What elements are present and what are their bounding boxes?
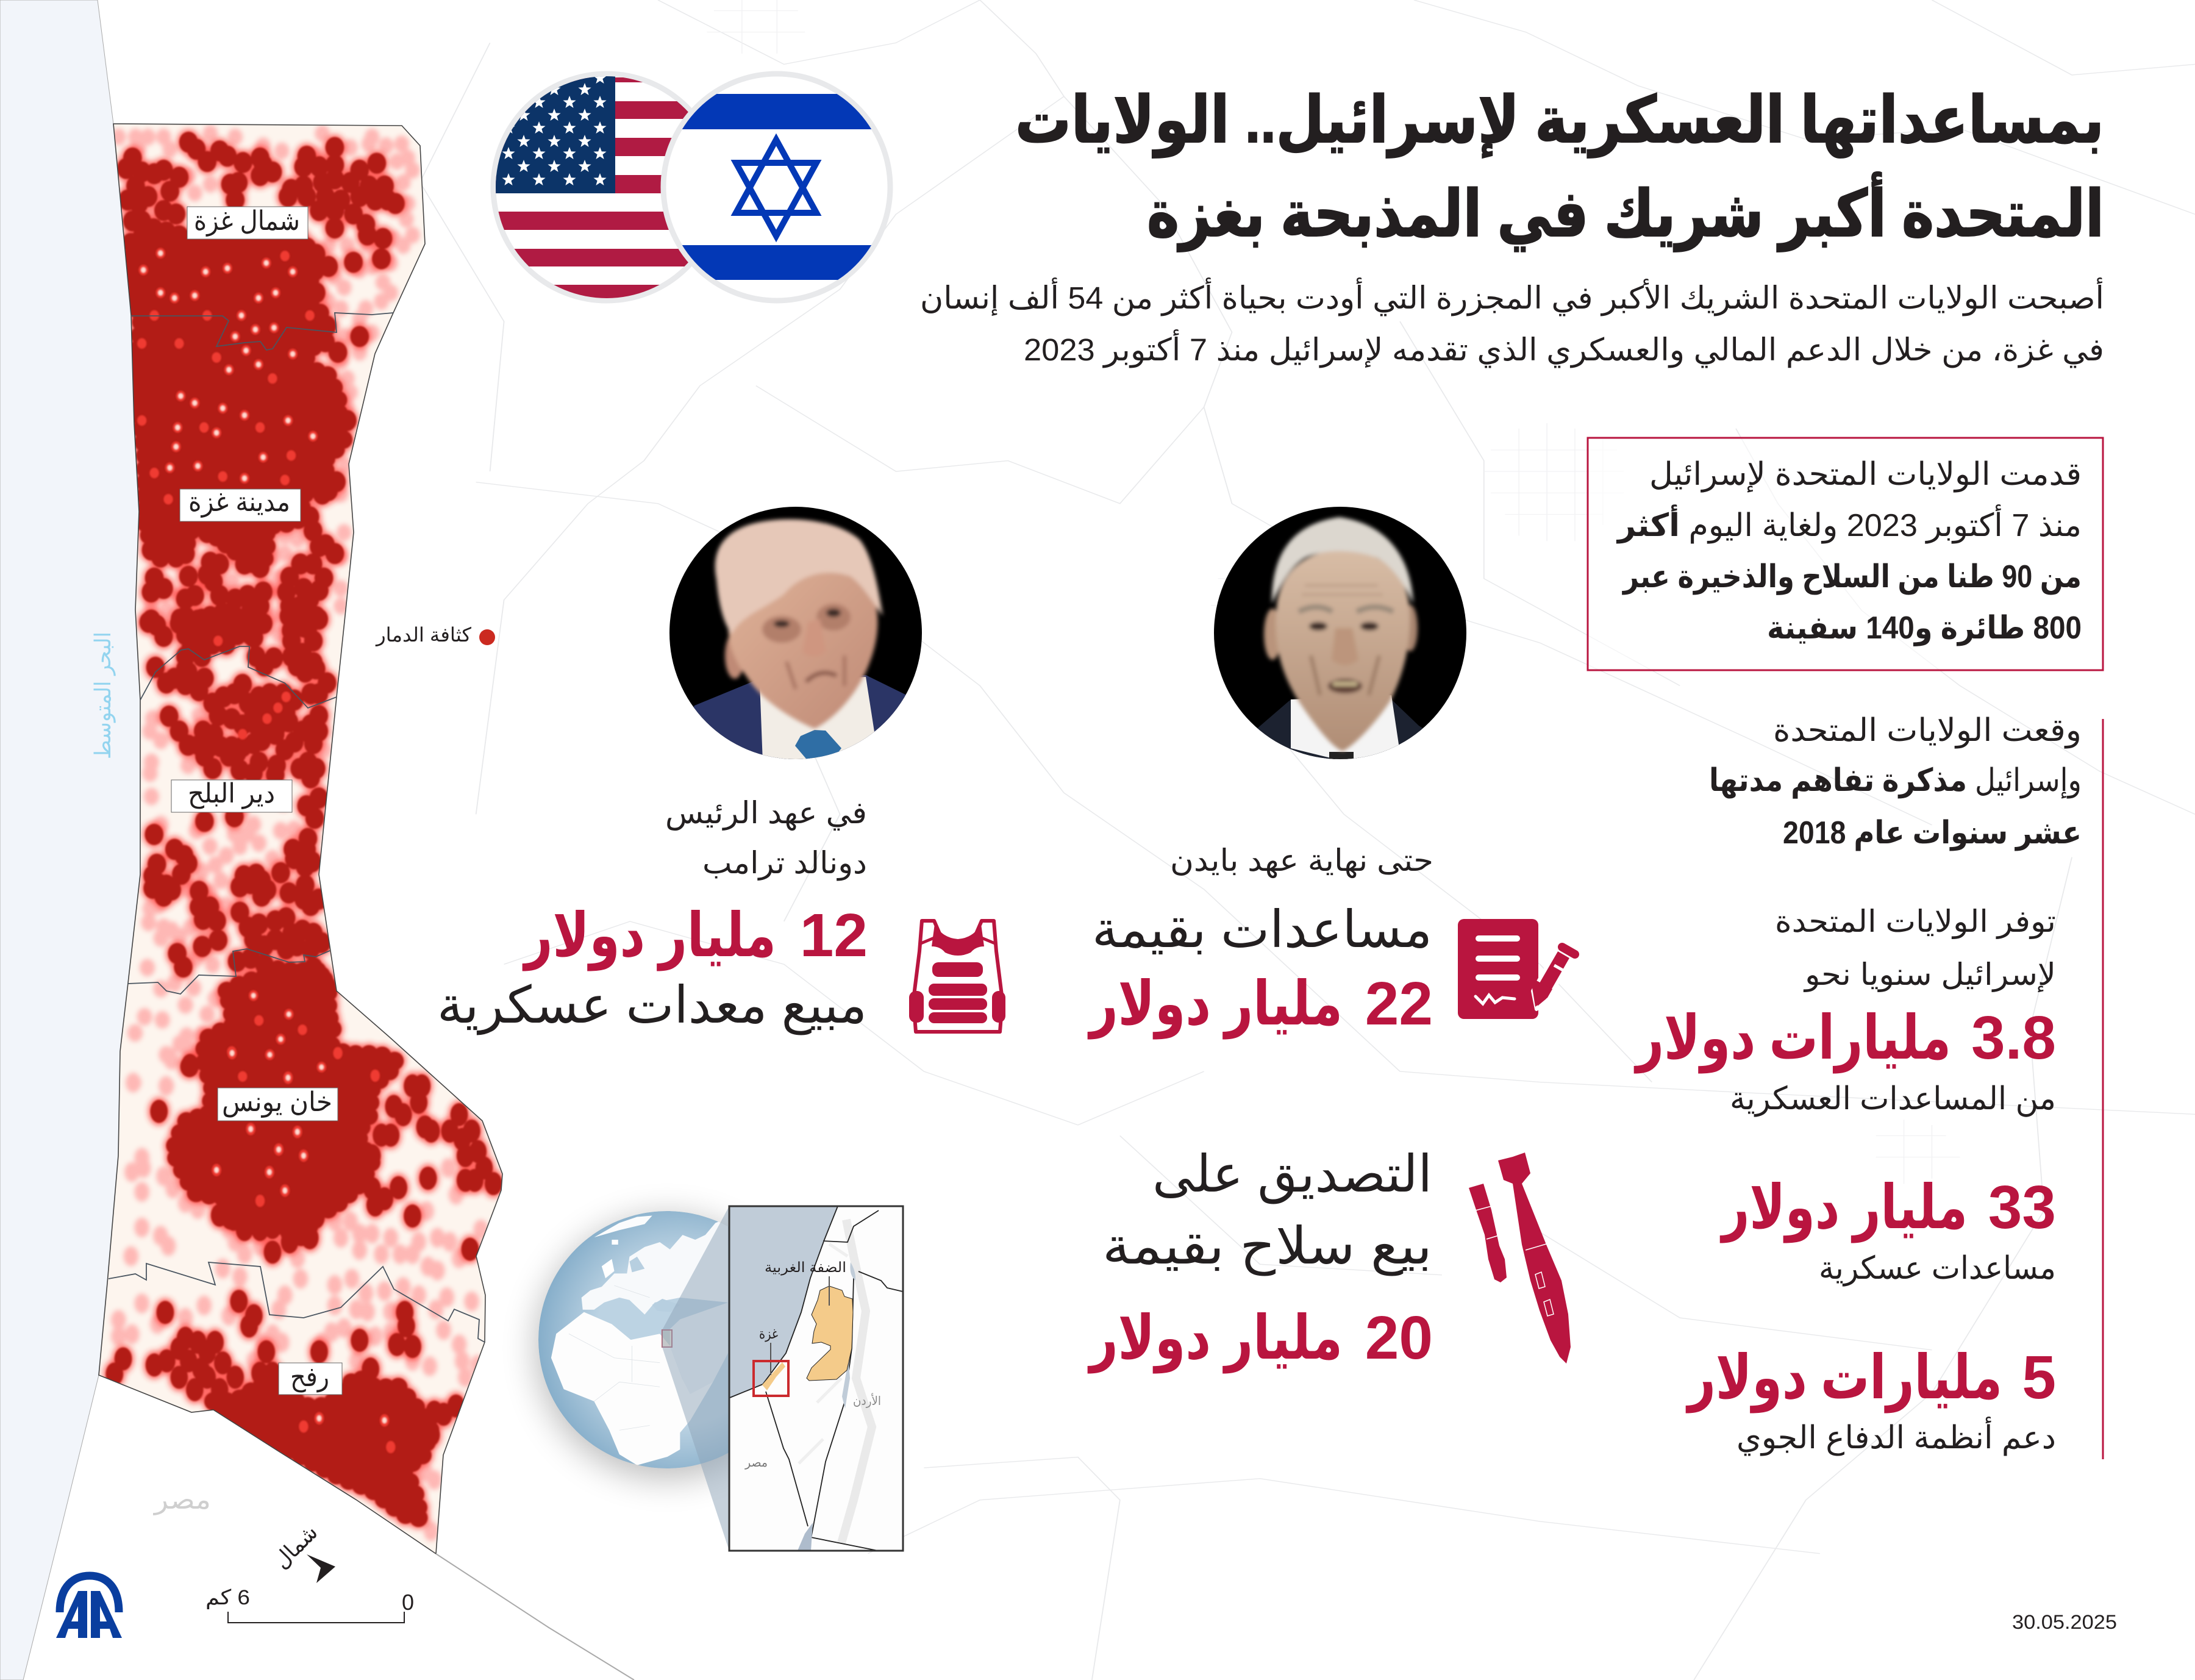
inset map: الضفة الغربية xyxy=(765,1259,846,1276)
stat: 3.8 billion annually: مليارات دولار xyxy=(1633,1004,1951,1074)
stat: 3.8 billion annually: لإسرائيل سنويا نحو xyxy=(1803,957,2056,992)
legend: destruction density: كثافة الدمار xyxy=(375,624,472,646)
label: Trump era: دونالد ترامب xyxy=(702,846,867,881)
logo: AA xyxy=(56,1576,122,1638)
title xyxy=(1015,84,2104,252)
text block: memorandum of understanding: وقعت الولايات المتحدة xyxy=(1773,713,2082,749)
stat: 5 billion: دعم أنظمة الدفاع الجوي xyxy=(1736,1417,2056,1456)
callout: weapons delivered: 800 طائرة و140 سفينة xyxy=(1767,610,2082,646)
label: Gaza City: مدينة غزة xyxy=(188,487,290,518)
inset map xyxy=(729,1206,903,1551)
right column divider xyxy=(2102,719,2104,1459)
stat: 12 billion equipment: مبيع معدات عسكرية xyxy=(437,976,867,1035)
zoom wedge xyxy=(662,1206,729,1551)
label: Rafah xyxy=(279,1362,342,1395)
stat: 3.8 billion annually: 3.8 xyxy=(1971,1004,2056,1072)
text block: memorandum of understanding: عشر سنوات عام 2018 xyxy=(1783,815,2082,851)
portrait: Biden xyxy=(1207,507,1476,762)
inset map: غزة xyxy=(759,1326,778,1342)
callout: weapons delivered: منذ 7 أكتوبر 2023 ولغاية اليوم أكثر xyxy=(1616,504,2082,544)
stat: 20 billion arms sale xyxy=(1087,1145,1433,1374)
portrait: Trump xyxy=(665,507,933,762)
north arrow: شمال xyxy=(268,1520,323,1573)
stat: 33 billion: 33 xyxy=(1988,1173,2056,1242)
callout: weapons delivered: قدمت الولايات المتحدة لإسرائيل xyxy=(1649,457,2082,493)
label: Trump era: في عهد الرئيس xyxy=(665,796,867,831)
stat: 20 billion arms sale: مليار دولار xyxy=(1087,1304,1343,1374)
sea xyxy=(0,0,140,1680)
stat: 20 billion arms sale: بيع سلاح بقيمة xyxy=(1102,1217,1432,1276)
scale bar: 0 xyxy=(402,1590,414,1615)
stat: 22 billion aid xyxy=(1087,901,1433,1040)
icon: bombs xyxy=(1469,1153,1571,1364)
stat: 33 billion: مليار دولار xyxy=(1719,1173,1968,1243)
globe locator xyxy=(536,1211,798,1479)
icon: document and pen xyxy=(1458,919,1575,1019)
stat: 12 billion equipment xyxy=(437,901,868,1035)
label: Khan Younis: خان يونس xyxy=(222,1087,332,1118)
label: Deir al-Balah xyxy=(171,779,292,812)
stat: 12 billion equipment: مليار دولار xyxy=(522,901,776,971)
stat: 20 billion arms sale: 20 xyxy=(1365,1304,1433,1372)
text block: memorandum of understanding xyxy=(1709,713,2082,851)
subtitle: أصبحت الولايات المتحدة الشريك الأكبر في المجزرة التي أودت بحياة أكثر من 54 ألف إنسان xyxy=(920,277,2104,316)
stat: 22 billion aid: مليار دولار xyxy=(1087,970,1343,1040)
map: Gaza strip destruction density xyxy=(99,124,634,1680)
scale bar xyxy=(205,1586,414,1623)
date: 30.05.2025 xyxy=(2012,1611,2117,1633)
callout: weapons delivered xyxy=(1588,438,2103,670)
subtitle xyxy=(920,277,2104,368)
label: Mediterranean Sea: البحر المتوسط xyxy=(90,632,116,759)
subtitle: في غزة، من خلال الدعم المالي والعسكري الذي تقدمه لإسرائيل منذ 7 أكتوبر 2023 xyxy=(1024,329,2104,368)
label: Rafah: رفح xyxy=(290,1362,329,1393)
flag: United States xyxy=(476,61,744,303)
stat: 5 billion: مليارات دولار xyxy=(1685,1343,2002,1414)
label: Deir al-Balah: دير البلح xyxy=(188,779,275,809)
stat: 20 billion arms sale: التصديق على xyxy=(1152,1145,1432,1204)
flag: Israel xyxy=(659,74,896,301)
callout: weapons delivered: من 90 طنا من السلاح والذخيرة عبر xyxy=(1621,559,2082,595)
label: Biden era: حتى نهاية عهد بايدن xyxy=(1170,843,1433,879)
stat: 5 billion xyxy=(1685,1343,2056,1456)
stat: 3.8 billion annually xyxy=(1633,904,2056,1117)
label: Egypt: مصر xyxy=(153,1485,211,1515)
scale bar: 6 كم xyxy=(205,1586,250,1609)
stat: 33 billion xyxy=(1719,1173,2056,1287)
stat: 22 billion aid: 22 xyxy=(1365,970,1433,1038)
north arrow xyxy=(268,1520,335,1583)
text block: memorandum of understanding: وإسرائيل مذكرة تفاهم مدتها xyxy=(1709,763,2082,799)
label: Trump era xyxy=(665,796,867,881)
stat: 22 billion aid: مساعدات بقيمة xyxy=(1092,901,1432,958)
stat: 3.8 billion annually: من المساعدات العسكرية xyxy=(1730,1081,2056,1117)
inset map: مصر xyxy=(744,1456,768,1470)
inset map: الأردن xyxy=(853,1393,881,1408)
icon: body armour vest xyxy=(909,921,1005,1032)
stat: 3.8 billion annually: توفر الولايات المتحدة xyxy=(1775,904,2056,939)
label: North Gaza: شمال غزة xyxy=(194,206,300,237)
stat: 12 billion equipment: 12 xyxy=(800,901,868,970)
stat: 33 billion: مساعدات عسكرية xyxy=(1819,1251,2056,1287)
stat: 5 billion: 5 xyxy=(2022,1343,2056,1412)
